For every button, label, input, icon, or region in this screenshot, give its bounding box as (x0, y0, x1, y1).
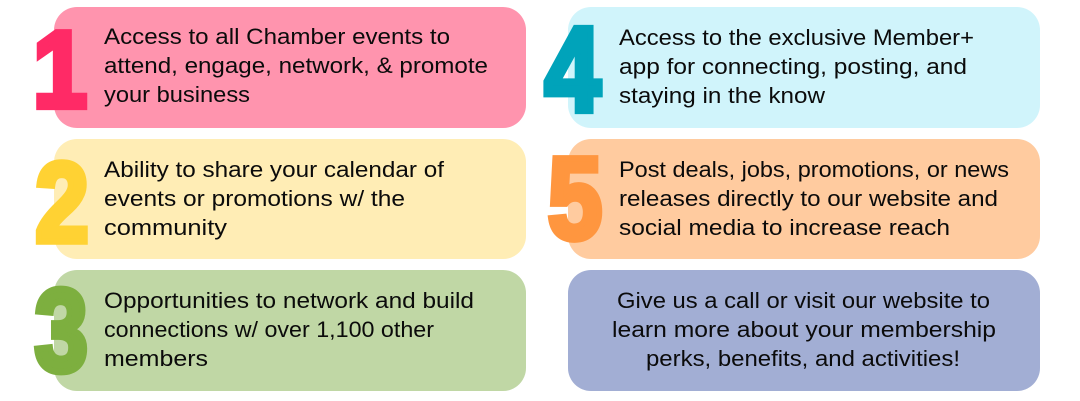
text: perk 2: community (104, 215, 228, 240)
text: perk 5: Post deals, jobs, promotions, or news (619, 157, 1009, 182)
text: perk 5 (619, 157, 1009, 240)
numeral 1: 1 (33, 9, 87, 130)
text: call to action (612, 288, 996, 371)
text: perk 3: connections w/ over 1,100 other (104, 317, 435, 342)
text: perk 4: staying in the know (619, 83, 826, 108)
panel: perk 2 (35, 139, 526, 266)
text: perk 5: social media to increase reach (619, 215, 950, 240)
text: perk 3: members (104, 346, 208, 371)
numeral 4: 4 (545, 4, 600, 137)
text: perk 4: Access to the exclusive Member+ (619, 25, 974, 50)
panel: perk 3 (35, 264, 526, 395)
text: call to action: learn more about your membership (612, 317, 996, 342)
text: call to action: perks, benefits, and activities! (646, 346, 960, 371)
panel: perk 1 (33, 7, 526, 130)
text: perk 5: releases directly to our website and (619, 186, 998, 211)
text: perk 1 (104, 24, 488, 107)
panel: perk 5 (548, 133, 1040, 263)
numeral 3: 3 (35, 264, 88, 395)
text: perk 3: Opportunities to network and build (104, 288, 474, 313)
text: perk 1: Access to all Chamber events to (104, 24, 450, 49)
text: perk 2 (104, 157, 445, 240)
numeral 5: 5 (548, 133, 602, 263)
panel: call to action (568, 270, 1040, 391)
text: perk 2: Ability to share your calendar of (104, 157, 445, 182)
text: perk 3 (104, 288, 474, 371)
text: perk 1: attend, engage, network, & promote (104, 53, 488, 78)
text: call to action: Give us a call or visit our website to (617, 288, 990, 313)
panel: perk 4 (545, 4, 1040, 137)
numeral 2: 2 (35, 140, 89, 266)
text: perk 1: your business (104, 82, 250, 107)
text: perk 4: app for connecting, posting, and (619, 54, 967, 79)
text: perk 4 (619, 25, 974, 108)
text: perk 2: events or promotions w/ the (104, 186, 405, 211)
